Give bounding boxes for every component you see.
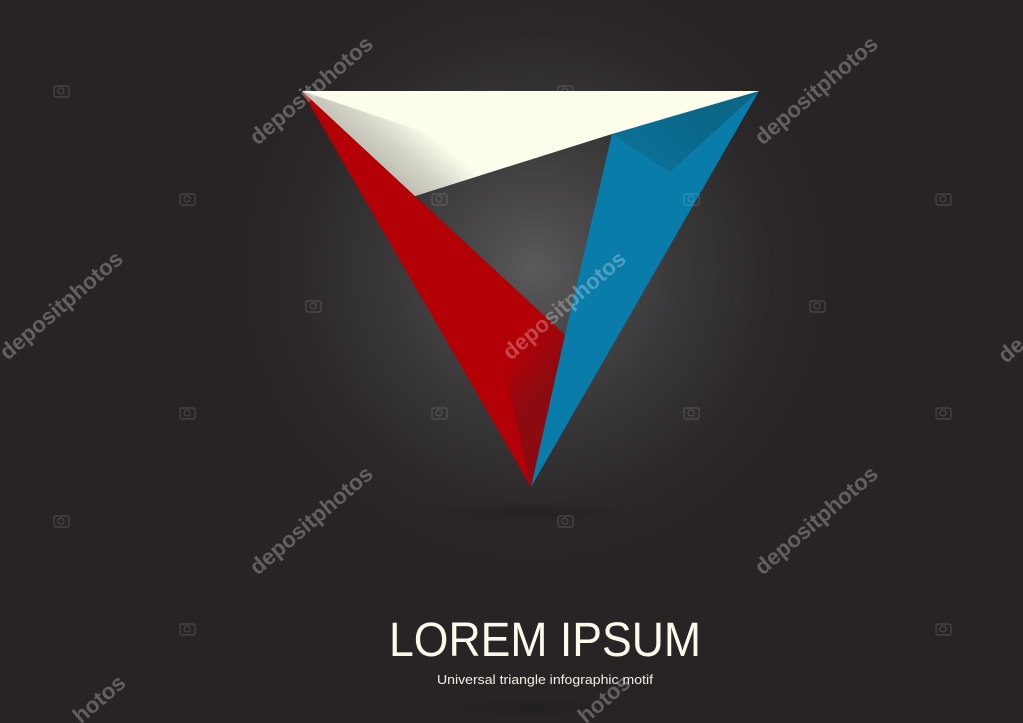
blue blade	[531, 91, 759, 487]
watermarks: depositphotos	[750, 31, 883, 150]
floor shadow under caption	[431, 698, 631, 718]
red blade	[302, 91, 565, 487]
red blade dark fold	[507, 302, 565, 487]
cream blade grey fold	[302, 91, 480, 196]
blue blade dark fold	[612, 91, 759, 172]
cream blade	[302, 91, 759, 196]
watermarks: depositphotos	[498, 246, 631, 365]
watermarks: depositphotos	[245, 461, 378, 580]
triangle logo	[302, 91, 759, 487]
watermarks: depositphotos	[245, 31, 378, 150]
watermark camera icons	[54, 86, 951, 635]
watermarks: depositphotos	[750, 461, 883, 580]
floor shadow under triangle	[426, 502, 636, 524]
subtitle: Universal triangle infographic motif	[437, 672, 653, 687]
title: LOREM IPSUM	[389, 614, 701, 667]
